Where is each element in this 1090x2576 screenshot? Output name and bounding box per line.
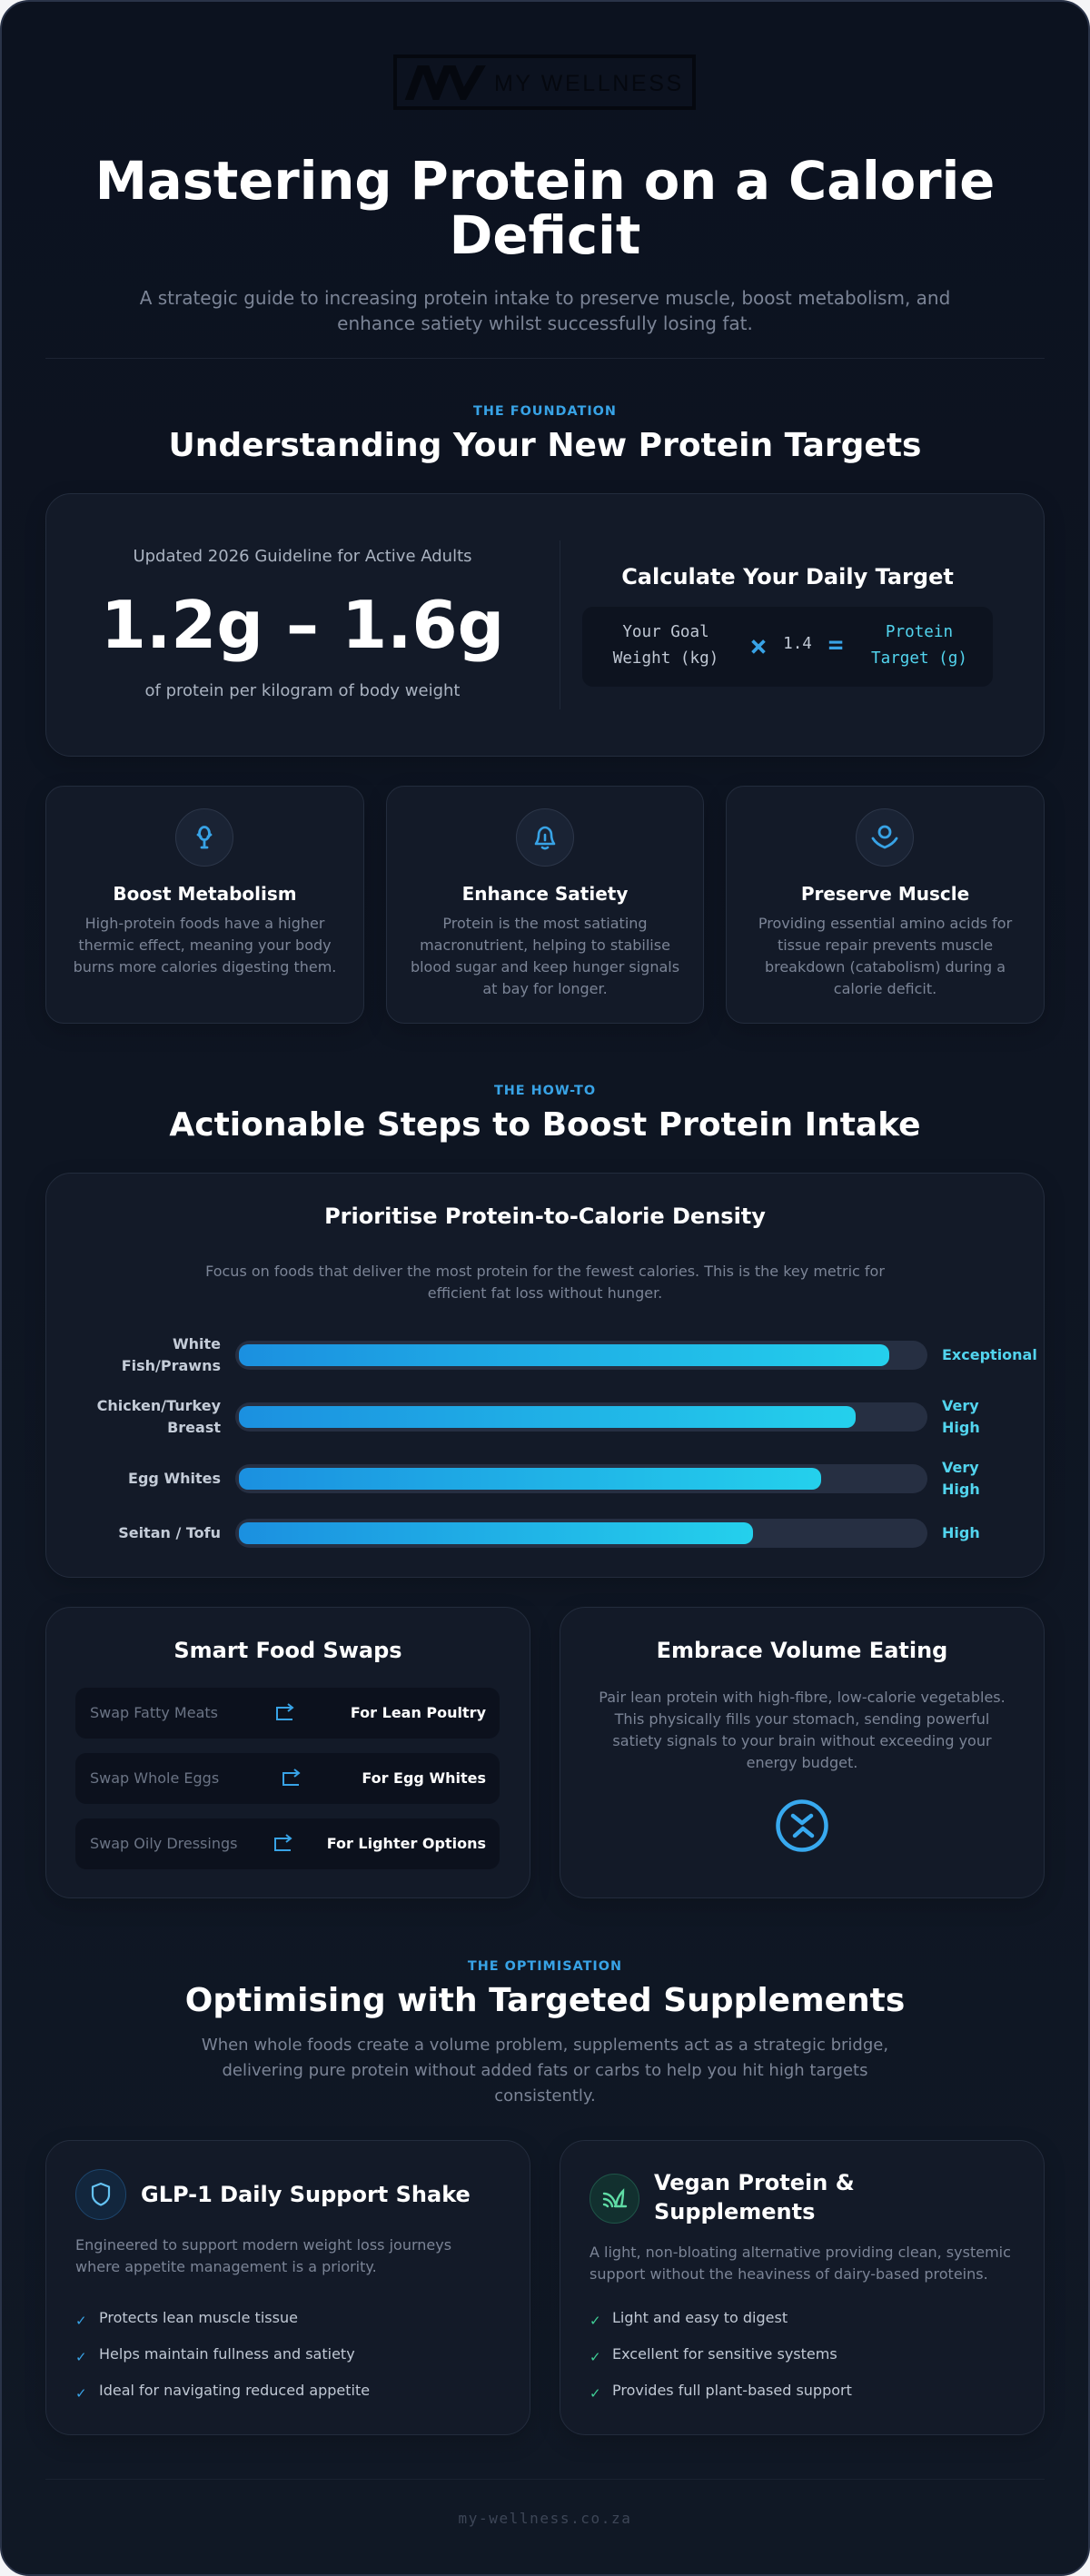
GLP-1 heading: GLP-1 Daily Support Shake [141, 2182, 471, 2207]
description: macronutrient, helping to stabilise [420, 936, 670, 954]
from: Swap Whole Eggs [90, 1769, 219, 1787]
panel: volume eating [560, 1607, 1045, 1898]
description: at bay for longer. [482, 980, 608, 997]
description: thermic effect, meaning your body [78, 936, 332, 954]
value: High [942, 1481, 980, 1498]
title: Mastering Protein on a Calorie [95, 151, 995, 212]
label: Chicken/Turkey [97, 1397, 221, 1414]
logo wordmark: MY WELLNESS [494, 71, 684, 96]
check: ✓ [75, 2349, 87, 2365]
icon: compress circle [776, 1799, 828, 1852]
description: High-protein foods have a higher [85, 915, 324, 932]
bar: white fish [122, 1335, 1037, 1374]
benefit: Provides full plant-based support [612, 2382, 852, 2399]
from: Swap Fatty Meats [90, 1704, 218, 1721]
icon: person [856, 808, 914, 867]
description: breakdown (catabolism) during a [765, 958, 1006, 976]
subtitle: enhance satiety whilst successfully losing fat. [337, 312, 753, 334]
label: Egg Whites [128, 1470, 221, 1487]
value [942, 1459, 980, 1498]
to: For Egg Whites [362, 1769, 486, 1787]
panel: protein density chart [45, 1173, 1045, 1578]
section eyebrow: the how-to: THE HOW-TO [494, 1084, 596, 1098]
swap row: eggs [75, 1753, 500, 1804]
big stat: 1.2g – 1.6g [101, 587, 504, 663]
benefit: Excellent for sensitive systems [612, 2345, 837, 2363]
value: Very [942, 1397, 979, 1414]
formula output [871, 623, 967, 667]
panel: protein target hero [45, 493, 1045, 757]
section eyebrow: the optimisation: THE OPTIMISATION [468, 1959, 622, 1974]
to: For Lean Poultry [351, 1704, 486, 1721]
swap row: dressings [75, 1818, 500, 1869]
GLP-1 description: Engineered to support modern weight loss journeys [75, 2236, 451, 2254]
icon: swap arrow [282, 1769, 300, 1786]
description: burns more calories digesting them. [74, 958, 336, 976]
track [235, 1519, 927, 1548]
to: For Lighter Options [327, 1835, 486, 1852]
benefit: Protects lean muscle tissue [99, 2309, 298, 2326]
volume description [599, 1689, 1006, 1771]
label: Seitan / Tofu [118, 1524, 221, 1541]
value: Exceptional [942, 1346, 1037, 1363]
panel: GLP-1 shake [45, 2140, 530, 2435]
section description [202, 2036, 888, 2105]
volume description: energy budget. [747, 1754, 857, 1771]
description: tissue repair prevents muscle [778, 936, 993, 954]
GLP-1 benefits [75, 2309, 370, 2402]
track [235, 1402, 927, 1432]
subtitle: A strategic guide to increasing protein intake to preserve muscle, boost metabolism, and [140, 287, 950, 309]
check: ✓ [590, 2349, 601, 2365]
equals sign: = [828, 629, 843, 659]
check: ✓ [590, 2385, 601, 2402]
vegan heading [654, 2170, 855, 2224]
volume heading: Embrace Volume Eating [657, 1638, 947, 1663]
logo [393, 54, 696, 110]
check: ✓ [590, 2313, 601, 2329]
subtitle [140, 287, 950, 334]
section heading: understanding targets: Understanding Your New Protein Targets [169, 427, 921, 464]
section description: When whole foods create a volume problem, supplements act as a strategic bridge, [202, 2036, 888, 2055]
check: ✓ [75, 2313, 87, 2329]
section description: consistently. [494, 2086, 596, 2105]
benefit: Helps maintain fullness and satiety [99, 2345, 355, 2363]
description [758, 915, 1012, 997]
title: Deficit [450, 205, 640, 266]
panel: enhance satiety [386, 786, 704, 1024]
description: Providing essential amino acids for [758, 915, 1012, 932]
logo mark [405, 65, 485, 100]
bar: seitan [118, 1519, 980, 1548]
icon: shield [75, 2169, 126, 2220]
panel: preserve muscle [726, 786, 1045, 1024]
label [97, 1397, 221, 1436]
check: ✓ [75, 2385, 87, 2402]
formula input: Weight (kg) [613, 649, 718, 667]
panel: vegan protein [560, 2140, 1045, 2435]
footer url: my-wellness.co.za [459, 2510, 631, 2527]
volume description: This physically fills your stomach, sending powerful [615, 1710, 989, 1728]
section heading: supplements: Optimising with Targeted Supplements [185, 1982, 905, 2019]
heading: Enhance Satiety [462, 883, 628, 905]
value: High [942, 1419, 980, 1436]
density heading: Prioritise Protein-to-Calorie Density [324, 1204, 766, 1229]
swap row: meats [75, 1688, 500, 1739]
icon: leaf [590, 2174, 639, 2224]
density description: efficient fat loss without hunger. [428, 1284, 662, 1302]
value: Very [942, 1459, 979, 1476]
value: High [942, 1524, 980, 1541]
multiply sign: × [749, 629, 768, 663]
section eyebrow: the foundation: THE FOUNDATION [473, 404, 617, 419]
from: Swap Oily Dressings [90, 1835, 237, 1852]
description: Protein is the most satiating [442, 915, 648, 932]
description [411, 915, 679, 997]
vegan heading: Supplements [654, 2199, 815, 2224]
volume description: Pair lean protein with high-fibre, low-calorie vegetables. [599, 1689, 1006, 1706]
label [122, 1335, 221, 1374]
formula input: Your Goal [622, 623, 709, 641]
GLP-1 description: where appetite management is a priority. [75, 2258, 377, 2275]
benefit: Ideal for navigating reduced appetite [99, 2382, 370, 2399]
vegan description: support without the heaviness of dairy-based proteins. [590, 2265, 988, 2283]
calculator formula [582, 607, 993, 687]
guideline label: Updated 2026 Guideline for Active Adults [133, 547, 472, 566]
vegan benefits [590, 2309, 852, 2402]
title [95, 151, 995, 266]
bar: egg whites [128, 1459, 980, 1498]
vegan heading: Vegan Protein & [654, 2170, 855, 2195]
GLP-1 description [75, 2236, 451, 2275]
vegan description: A light, non-bloating alternative providing clean, systemic [590, 2244, 1011, 2261]
icon: bell [516, 808, 574, 867]
section description: delivering pure protein without added fats or carbs to help you hit high targets [222, 2061, 868, 2080]
formula output: Protein [886, 623, 953, 641]
bar: chicken [97, 1397, 980, 1436]
multiplier: 1.4 [783, 635, 812, 653]
label: Fish/Prawns [122, 1357, 221, 1374]
description: blood sugar and keep hunger signals [411, 958, 679, 976]
icon: swap arrow [276, 1703, 294, 1720]
calculator heading: Calculate Your Daily Target [621, 564, 954, 590]
density description [205, 1263, 885, 1302]
heading: Boost Metabolism [113, 883, 297, 905]
section heading: actionable steps: Actionable Steps to Boost Protein Intake [169, 1106, 921, 1144]
track [235, 1341, 927, 1370]
value [942, 1397, 980, 1436]
swaps heading: Smart Food Swaps [173, 1638, 402, 1663]
stat caption: of protein per kilogram of body weight [145, 681, 460, 700]
label: Breast [167, 1419, 221, 1436]
density description: Focus on foods that deliver the most protein for the fewest calories. This is the key metric for [205, 1263, 885, 1280]
icon: swap arrow [274, 1834, 292, 1851]
description: calorie deficit. [834, 980, 936, 997]
formula output: Target (g) [871, 649, 967, 667]
label: White [173, 1335, 221, 1352]
vegan description [590, 2244, 1011, 2283]
panel: smart food swaps [45, 1607, 530, 1898]
track [235, 1464, 927, 1493]
formula input [612, 623, 718, 667]
volume description: satiety signals to your brain without exceeding your [612, 1732, 992, 1749]
panel: boost metabolism [45, 786, 364, 1024]
heading: Preserve Muscle [801, 883, 969, 905]
icon: metabolism [175, 808, 233, 867]
benefit: Light and easy to digest [612, 2309, 788, 2326]
description [74, 915, 336, 976]
